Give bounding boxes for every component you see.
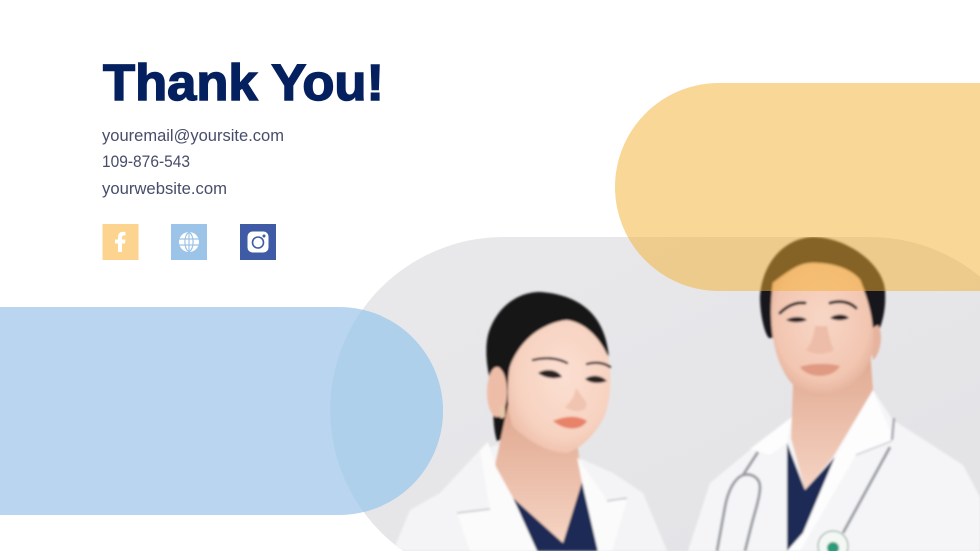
photo: male doctor xyxy=(688,237,980,551)
neck xyxy=(495,405,582,543)
icon: facebook xyxy=(102,224,138,260)
title: Thank You! xyxy=(103,54,384,111)
coat xyxy=(393,445,667,551)
nose xyxy=(565,388,587,411)
email: youremail@yoursite.com xyxy=(102,127,284,145)
hair xyxy=(760,237,885,338)
shape: yellow pill xyxy=(615,83,980,291)
neck xyxy=(791,350,873,490)
phone: 109-876-543 xyxy=(102,153,190,171)
eyes xyxy=(538,370,562,378)
ear xyxy=(487,367,507,417)
stethoscope xyxy=(717,447,890,551)
eyebrows xyxy=(533,358,610,367)
ear xyxy=(868,325,881,360)
eyebrows xyxy=(780,302,856,313)
coat lapels xyxy=(752,428,836,550)
coat xyxy=(688,390,980,551)
navy scrub xyxy=(787,443,835,551)
icon: instagram xyxy=(240,224,276,260)
navy scrub xyxy=(513,482,598,551)
contact details xyxy=(102,127,284,198)
face xyxy=(771,263,873,397)
shape: blue pill xyxy=(0,307,443,515)
badge xyxy=(818,531,848,551)
coat lapels xyxy=(482,443,538,550)
eyes xyxy=(786,317,807,322)
nose xyxy=(806,326,834,354)
photo: female doctor xyxy=(393,292,667,551)
earring xyxy=(499,406,505,418)
lips xyxy=(800,364,840,376)
lips xyxy=(553,417,587,428)
icon: globe xyxy=(171,224,207,260)
panel: doctors photo pill xyxy=(330,237,980,551)
hair fringe xyxy=(501,292,610,370)
website: yourwebsite.com xyxy=(102,180,227,198)
face xyxy=(508,320,610,453)
hair back xyxy=(486,292,608,441)
